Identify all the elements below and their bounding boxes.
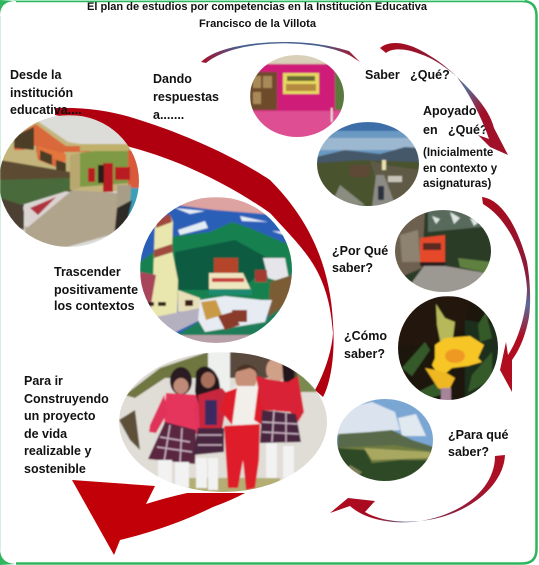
photo: mountain landscape: [336, 397, 434, 482]
label: Desde la institucion educativa: educativa....: [10, 103, 82, 117]
label: Para que saber: saber?: [448, 445, 489, 459]
label: Desde la institucion educativa: Desde la: [10, 68, 62, 82]
label: Para ir construyendo: Construyendo: [24, 392, 109, 406]
arrow: top arc to Saber: [201, 42, 360, 63]
label: Para ir construyendo: un proyecto: [24, 409, 96, 423]
photo: mural of the town: [140, 197, 293, 345]
photo: school courtyard: [0, 115, 140, 247]
label: Para ir construyendo: [24, 374, 109, 476]
title: Francisco de la Villota: [199, 18, 317, 30]
photo: town view: [316, 121, 420, 207]
student two: [193, 366, 228, 490]
photo: students in uniform: [119, 352, 329, 494]
label: Dando respuestas: Dando: [153, 72, 192, 86]
label: Como saber: [344, 329, 387, 361]
label: Dando respuestas: respuestas: [153, 90, 219, 104]
label: Apoyado en Que: en contexto y: [423, 163, 498, 175]
label: Desde la institucion educativa: institución: [10, 86, 73, 100]
label: Dando respuestas: [153, 72, 219, 122]
student one: [148, 367, 205, 488]
label: Trascender: los contextos: [54, 299, 135, 313]
label: Como saber: ¿Cómo: [344, 329, 387, 343]
label: Apoyado en Que: Apoyado: [423, 104, 477, 118]
label: Para ir construyendo: Para ir: [24, 374, 63, 388]
title: El plan de estudios por competencias en la Institución Educativa: [87, 1, 428, 13]
student four: [256, 358, 304, 478]
label: Apoyado en Que: [423, 104, 498, 190]
label: Para que saber: [448, 428, 508, 459]
label: Trascender: [54, 265, 138, 313]
photo: orange bus on road: [394, 209, 492, 293]
label: Para ir construyendo: realizable y: [24, 444, 91, 458]
label: Saber Que: Saber ¿Qué?: [365, 68, 450, 82]
label: Apoyado en Que: asignaturas): [423, 178, 492, 190]
label: Dando respuestas: a.......: [153, 108, 184, 122]
label: Trascender: Trascender: [54, 265, 121, 279]
label: Por que saber: ¿Por Qué: [332, 244, 388, 258]
arrow: large spiral from school to students: [55, 108, 334, 555]
title: [87, 1, 428, 30]
student three: [220, 364, 268, 490]
arrow: Saber to Apoyado: [380, 43, 508, 155]
arrow: Apoyado to Como: [482, 197, 530, 392]
label: Por que saber: [332, 244, 388, 275]
label: Apoyado en Que: (Inicialmente: [423, 147, 493, 159]
label: Por que saber: saber?: [332, 261, 373, 275]
label: Para ir construyendo: de vida: [24, 427, 68, 441]
photo: yellow flower: [397, 296, 499, 402]
arrow: Para que to mountain: [330, 455, 505, 522]
label: Como saber: saber?: [344, 347, 385, 361]
label: Desde la institucion educativa: [10, 68, 82, 117]
label: Para ir construyendo: sostenible: [24, 462, 86, 476]
label: Apoyado en Que: en ¿Qué?: [423, 123, 488, 137]
label: Para que saber: ¿Para qué: [448, 428, 508, 442]
photo: pink school wall: [250, 54, 346, 138]
label: Trascender: positivamente: [54, 283, 138, 297]
